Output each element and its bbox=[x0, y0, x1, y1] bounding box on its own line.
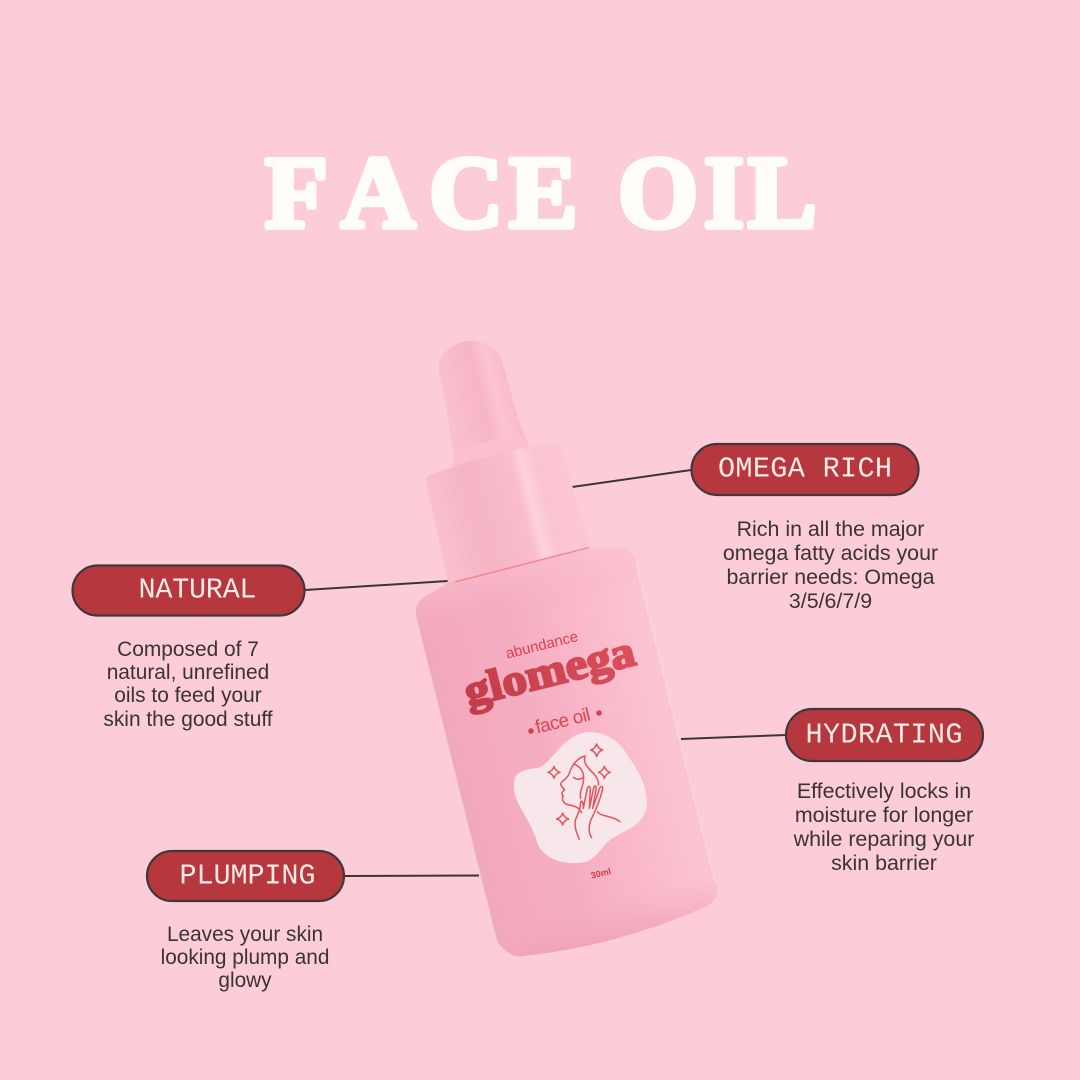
brand small: abundance bbox=[504, 628, 580, 663]
description: hydrating: while reparing your bbox=[793, 827, 974, 851]
cap ring bbox=[455, 548, 589, 582]
pill: natural bbox=[72, 566, 304, 616]
pill: plumping bbox=[147, 851, 344, 901]
callout: omega rich bbox=[692, 444, 938, 613]
description: hydrating: Effectively locks in bbox=[797, 779, 971, 803]
description: omega rich: Rich in all the major bbox=[737, 517, 924, 541]
brand name: glomega bbox=[459, 626, 640, 716]
description: plumping: Leaves your skin bbox=[167, 923, 323, 946]
product bottle bbox=[355, 314, 724, 967]
pill label: plumping: PLUMPING bbox=[180, 860, 316, 892]
pill: hydrating bbox=[786, 709, 983, 761]
description: omega rich: 3/5/6/7/9 bbox=[789, 589, 872, 613]
bottle body bbox=[410, 537, 724, 967]
pill label: hydrating: HYDRATING bbox=[806, 718, 962, 752]
dropper bulb bbox=[425, 332, 531, 469]
label blob bbox=[514, 732, 647, 863]
bullets bbox=[528, 710, 602, 734]
volume: 30ml bbox=[590, 866, 612, 881]
description: hydrating: skin barrier bbox=[831, 851, 937, 875]
description: omega rich: omega fatty acids your bbox=[723, 541, 938, 565]
description: hydrating: moisture for longer bbox=[795, 803, 973, 827]
description: natural: skin the good stuff bbox=[103, 708, 273, 731]
callout: natural bbox=[72, 566, 304, 731]
description: plumping: glowy bbox=[218, 969, 272, 992]
description: natural: oils to feed your bbox=[114, 684, 262, 707]
dropper collar bbox=[450, 431, 531, 468]
connector lines bbox=[305, 470, 786, 876]
description: natural: natural, unrefined bbox=[107, 661, 269, 684]
body highlight bbox=[636, 564, 715, 882]
description: omega rich: barrier needs: Omega bbox=[726, 565, 935, 589]
pill: omega rich bbox=[692, 444, 918, 495]
face icon bbox=[548, 744, 620, 839]
title: FACE OIL bbox=[265, 136, 817, 250]
description: plumping: looking plump and bbox=[161, 946, 329, 969]
callout: hydrating bbox=[786, 709, 983, 875]
dropper cap bbox=[421, 438, 590, 583]
description: natural: Composed of 7 bbox=[117, 638, 259, 661]
callout: plumping bbox=[147, 851, 344, 992]
pill label: natural: NATURAL bbox=[138, 574, 256, 606]
pill label: omega rich: OMEGA RICH bbox=[718, 452, 892, 486]
product name: face oil bbox=[533, 705, 593, 738]
